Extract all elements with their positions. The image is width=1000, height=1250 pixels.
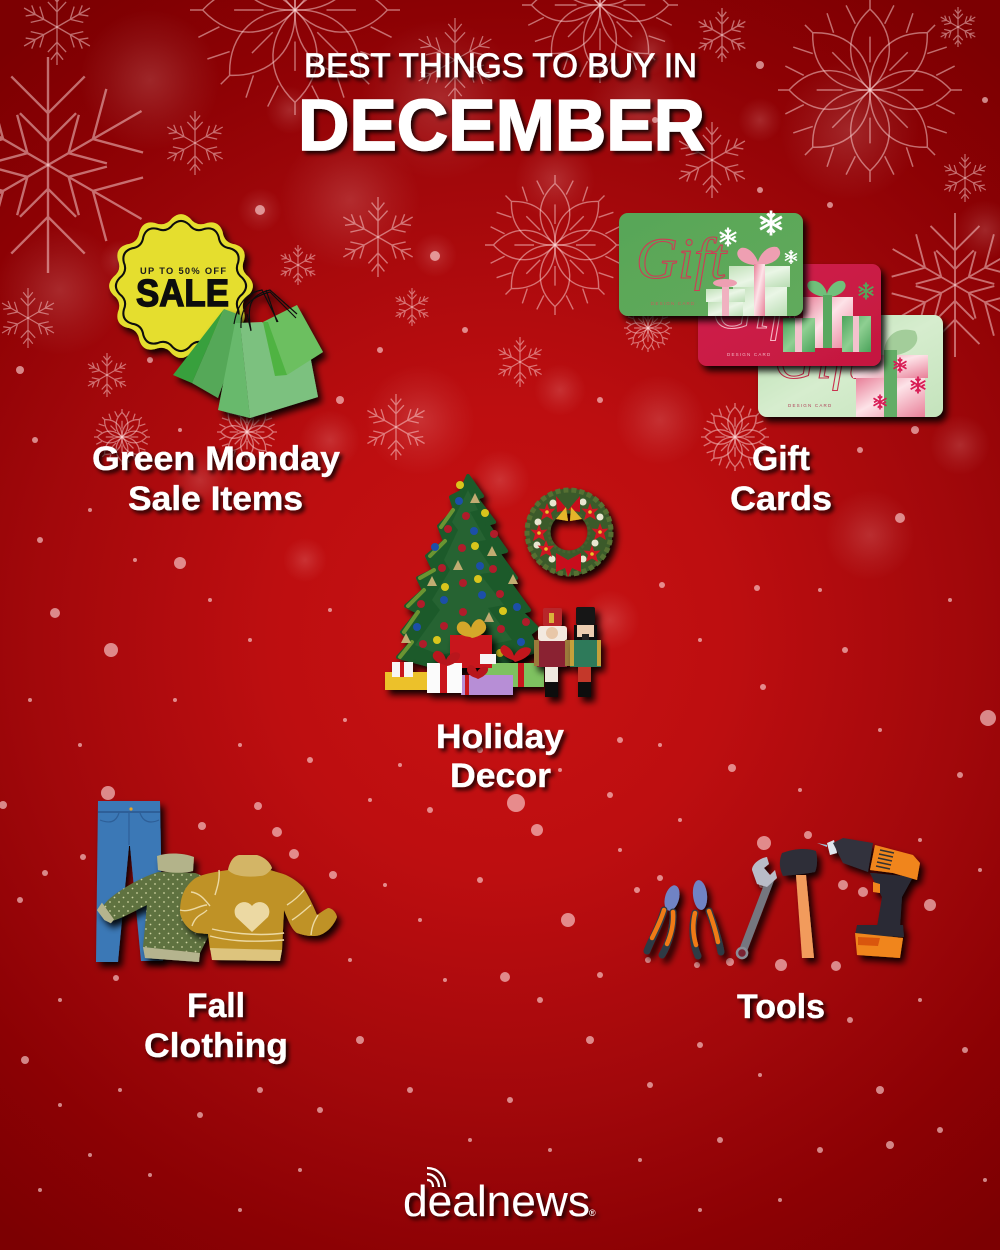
label: Holiday Decor: Decor [450, 757, 551, 795]
icon: jeans [96, 801, 163, 962]
title line 2: DECEMBER [298, 86, 705, 166]
label: Gift Cards: Cards [730, 480, 832, 518]
icon: green gift card [619, 210, 803, 316]
item: fall clothing [96, 801, 337, 1065]
icon: wreath [527, 490, 611, 577]
item: holiday decor [385, 476, 611, 795]
icon: christmas tree [398, 476, 538, 668]
icon: sale badge [109, 214, 253, 358]
label: Gift Cards: Gift [752, 440, 810, 478]
label: Green Monday Sale Items: Sale Items [128, 480, 303, 518]
icon: green nutcracker [570, 607, 601, 697]
icon: green sweater [100, 853, 217, 962]
logo registered mark: ® [589, 1208, 596, 1218]
item: tools [647, 838, 920, 1026]
icon: sale badge: UP TO 50% OFF [140, 266, 226, 276]
icon: green gift card: Gift [636, 226, 728, 291]
label: Green Monday Sale Items [92, 440, 340, 518]
decorative snowflakes [0, 0, 1000, 471]
logo wifi arcs [427, 1168, 445, 1187]
logo wordmark: dealnews [403, 1177, 590, 1226]
title line 1: BEST THINGS TO BUY IN [304, 47, 697, 85]
label: Green Monday Sale Items: Green Monday [92, 440, 340, 478]
icon: crimson gift card: Gift [712, 276, 804, 341]
logo: dealnews [403, 1168, 596, 1226]
icon: gift pile [385, 619, 544, 695]
icon: crimson gift card [698, 264, 881, 366]
label: Fall Clothing: Clothing [144, 1027, 288, 1065]
title [298, 47, 705, 166]
label: Gift Cards [730, 440, 832, 518]
icon: yellow sweater [180, 855, 337, 961]
icon: pale green gift card: Gift [774, 326, 866, 391]
label: Fall Clothing: Fall [187, 987, 245, 1025]
icon: green gift card: DESIGN CARD [651, 301, 695, 306]
icon: pale green gift card [758, 315, 943, 417]
label: Holiday Decor: Holiday [436, 718, 564, 756]
icon: pliers [647, 879, 721, 956]
icon: cordless drill [817, 838, 920, 958]
icon: hammer [780, 849, 817, 958]
background bokeh lights [0, 10, 1000, 650]
label: Tools: Tools [737, 988, 825, 1026]
icon: pale green gift card: DESIGN CARD [788, 403, 832, 408]
icon: shopping bags [173, 290, 323, 418]
icon: crimson gift card: DESIGN CARD [727, 352, 771, 357]
item: Green Monday sale items [92, 214, 340, 518]
label: Fall Clothing [144, 987, 288, 1065]
label: Holiday Decor [436, 718, 564, 795]
icon: sale badge: SALE [136, 273, 229, 315]
icon: wrench [737, 857, 777, 958]
icon: red nutcracker [534, 608, 570, 697]
item: gift cards [619, 210, 943, 518]
